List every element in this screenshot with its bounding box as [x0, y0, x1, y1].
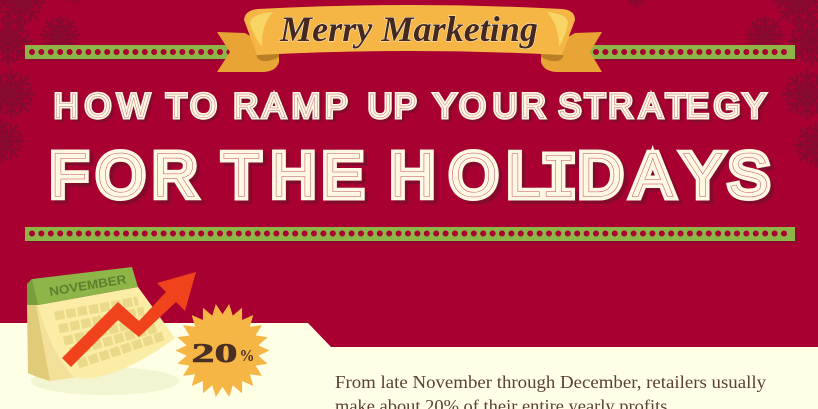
title line 2: [50, 142, 773, 219]
calendar date grid: [55, 301, 163, 364]
ribbon left fold: [257, 52, 279, 61]
title line 2 cream body: FOR THE HOLIDAYS: [50, 142, 769, 216]
title line 2 shadow: FOR THE HOLIDAYS: [54, 145, 773, 219]
ribbon right highlight: [547, 12, 568, 47]
title line 1 cream body: HOW TO RAMP UP YOUR STRATEGY: [54, 88, 766, 126]
calendar illustration: [27, 267, 196, 395]
title line 2 inline: FOR THE HOLIDAYS: [50, 142, 769, 216]
ribbon left highlight: [250, 12, 273, 47]
calendar month label: NOVEMBER: [48, 272, 127, 299]
cream lower panel: [0, 323, 818, 409]
calendar front page: [38, 287, 175, 379]
ribbon title: Merry Marketing: [279, 9, 538, 49]
bottom green dotted bar: [25, 227, 797, 243]
title line 1: [54, 88, 768, 128]
title line 1 inline: HOW TO RAMP UP YOUR STRATEGY: [54, 88, 766, 126]
badge percent sign: %: [240, 346, 254, 365]
starburst badge: [171, 299, 274, 402]
title line 1 shadow: HOW TO RAMP UP YOUR STRATEGY: [56, 90, 768, 128]
body text line 1: From late November through December, retailers usually: [335, 372, 766, 392]
ribbon right tail: [541, 32, 602, 72]
ribbon right fold: [541, 52, 563, 61]
snowflake decorations: [0, 0, 818, 168]
ribbon main band: [244, 5, 575, 55]
body text: [335, 372, 766, 409]
top right green dotted bar: [590, 45, 797, 61]
growth arrow: [62, 272, 196, 367]
ribbon banner: [217, 5, 602, 72]
top left green dotted bar: [25, 45, 230, 61]
ribbon left tail: [217, 32, 279, 72]
calendar ground shadow: [31, 367, 179, 395]
calendar green header: [27, 267, 138, 305]
calendar back pages: [27, 305, 75, 381]
badge number: 20: [192, 338, 238, 368]
